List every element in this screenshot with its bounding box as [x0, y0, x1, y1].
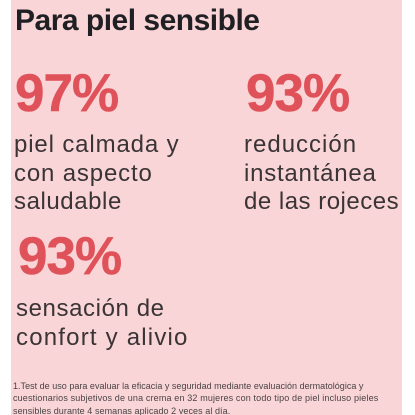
footnote: 1.Test de uso para evaluar la eficacia y seguridad mediante evaluación dermatológica y	[13, 381, 363, 391]
stat: 97%: 97%	[15, 64, 118, 123]
label: reduction description: de las rojeces	[244, 188, 399, 215]
label: comfort description	[16, 295, 189, 350]
stat: 93% comfort: 93%	[18, 227, 121, 286]
footnote: cuestionarios subjetivos de una crema en 32 mujeres con todo tipo de piel incluso pieles	[13, 393, 378, 403]
label: reduction description: instantánea	[244, 160, 377, 186]
label: 97% description	[14, 131, 179, 215]
label: 97% description: con aspecto	[14, 160, 153, 186]
label: reduction description: reducción	[244, 131, 357, 158]
title: Para piel sensible	[15, 4, 259, 37]
label: 97% description: piel calmada y	[14, 131, 179, 158]
label: 97% description: saludable	[14, 188, 122, 215]
label: comfort description: sensación de	[16, 295, 165, 322]
label: reduction description	[244, 131, 399, 215]
footnote	[13, 381, 378, 415]
stat: 93% reduction: 93%	[246, 64, 349, 123]
label: comfort description: confort y alivio	[16, 324, 189, 350]
